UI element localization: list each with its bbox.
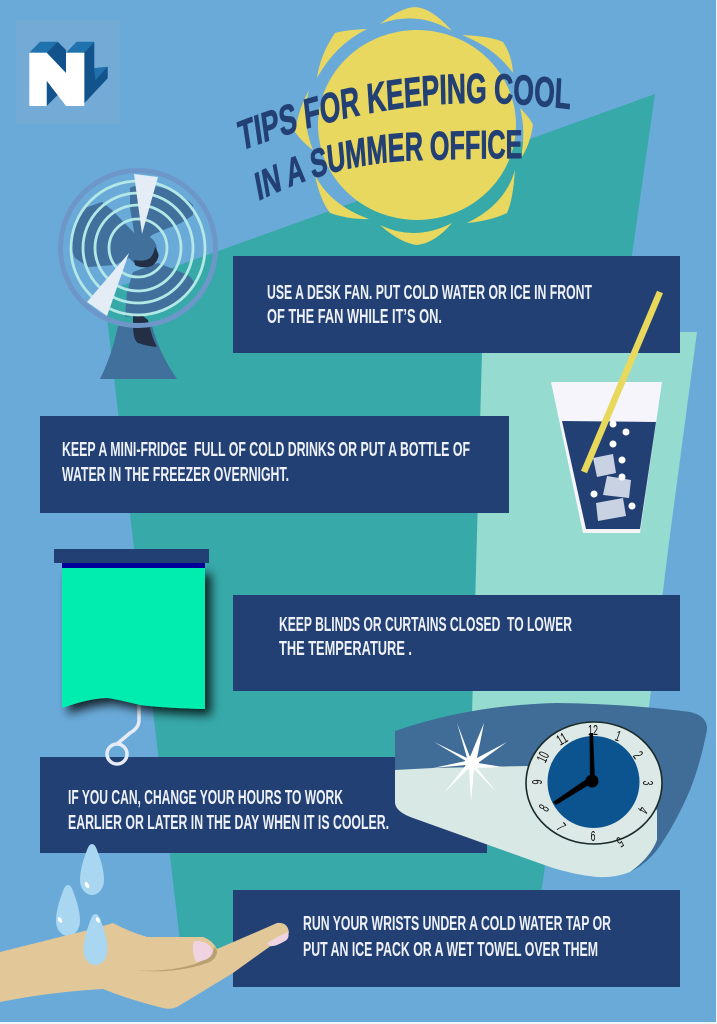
logo bbox=[16, 20, 120, 124]
clock numbers: 5 bbox=[613, 833, 626, 850]
fan blades bbox=[71, 185, 195, 317]
dark sky shape bbox=[395, 703, 707, 872]
blind pull cord bbox=[107, 705, 139, 764]
tip box 4: IF YOU CAN, CHANGE YOUR HOURS TO WORK bbox=[68, 786, 343, 809]
fan grille rings bbox=[71, 181, 205, 315]
clock numbers: 2 bbox=[629, 748, 646, 762]
hand bbox=[0, 923, 289, 1009]
thumb nail bbox=[193, 941, 213, 962]
tip box 4 bbox=[40, 757, 487, 853]
clock inner dial bbox=[548, 736, 640, 828]
tip box 5 bbox=[233, 890, 680, 987]
clock numbers bbox=[529, 722, 656, 850]
clock hands bbox=[553, 733, 598, 805]
fingertip nail bbox=[267, 932, 289, 946]
drop highlights bbox=[57, 881, 101, 923]
bubbles bbox=[590, 420, 636, 510]
clock numbers: 8 bbox=[536, 802, 553, 815]
finger crease bbox=[130, 947, 217, 971]
clock numbers: 9 bbox=[529, 780, 546, 784]
icon: glass of water bbox=[551, 292, 662, 533]
light ground shape bbox=[395, 766, 657, 877]
blind strip bbox=[62, 563, 205, 568]
clock numbers: 12 bbox=[588, 722, 598, 739]
fan hub crescent bbox=[134, 247, 159, 267]
clock numbers: 3 bbox=[639, 780, 656, 786]
clock numbers: 7 bbox=[552, 820, 569, 835]
star bbox=[433, 723, 507, 802]
clock numbers: 1 bbox=[613, 728, 623, 745]
blind fabric bbox=[62, 568, 205, 709]
title bbox=[236, 73, 570, 201]
clock numbers: 10 bbox=[534, 749, 553, 765]
icon: clock and sky bbox=[395, 703, 707, 877]
water drop left bbox=[56, 885, 80, 936]
icon: window blind bbox=[54, 549, 209, 764]
light teal background panel bbox=[472, 332, 697, 715]
blind top rail bbox=[54, 549, 209, 563]
tip box 2 bbox=[40, 416, 509, 513]
tip box 3 bbox=[233, 595, 680, 691]
title: TIPS FOR KEEPING COOL bbox=[236, 73, 570, 150]
fan bottom highlight bbox=[87, 253, 129, 316]
teal background shape bbox=[104, 94, 655, 950]
clock numbers: 4 bbox=[634, 803, 651, 816]
fan neck shadow bbox=[133, 308, 157, 347]
tip box 4: EARLIER OR LATER IN THE DAY WHEN IT IS COOLER. bbox=[68, 811, 389, 834]
fan outer ring bbox=[60, 170, 216, 326]
icon: desk fan bbox=[60, 170, 216, 379]
straw bbox=[584, 292, 660, 472]
tip box 2: WATER IN THE FREEZER OVERNIGHT. bbox=[62, 463, 289, 486]
clock numbers: 11 bbox=[554, 730, 571, 749]
sun bbox=[295, 7, 533, 245]
title: IN A SUMMER OFFICE bbox=[254, 130, 522, 201]
ice cubes bbox=[593, 454, 631, 521]
clock numbers: 6 bbox=[590, 828, 596, 845]
tip box 1 bbox=[233, 256, 680, 353]
clock face bbox=[526, 722, 662, 844]
fan base bbox=[100, 326, 177, 379]
tip box 1: OF THE FAN WHILE IT’S ON. bbox=[267, 305, 442, 328]
fan top highlight bbox=[134, 174, 158, 234]
tip box 3: THE TEMPERATURE . bbox=[279, 637, 412, 660]
water drop back bbox=[80, 844, 104, 895]
water drop front bbox=[84, 914, 108, 965]
icon: hand with water drops bbox=[0, 844, 289, 1009]
